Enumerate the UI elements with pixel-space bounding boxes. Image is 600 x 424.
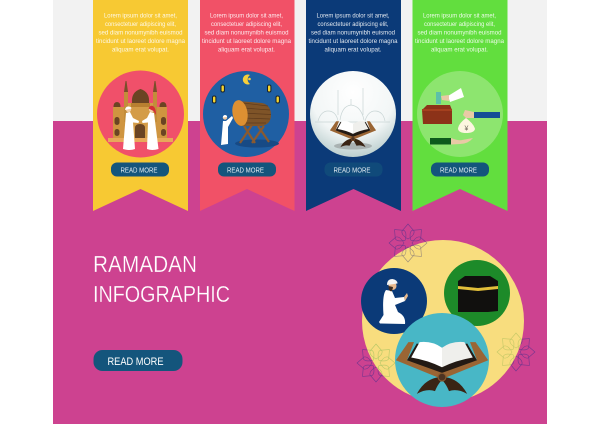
icon: mosque with two men [97, 70, 184, 158]
text block navy: sed diam nonumynibh euismod [311, 30, 395, 36]
icon: kaaba [444, 260, 510, 326]
main read more button: READ MORE [108, 356, 164, 368]
ribbon shape navy [306, 0, 401, 211]
text block green: consectetuer adipiscing elit, [424, 21, 495, 28]
text block green: sed diam nonumynibh euismod [418, 30, 502, 36]
text block navy: consectetuer adipiscing elit, [318, 21, 389, 28]
panel: navy ribbon [306, 0, 401, 211]
button red [218, 162, 276, 176]
button red: READ MORE [227, 165, 264, 174]
flower ornament left, purple part [357, 344, 395, 382]
text block yellow: Lorem ipsum dolor sit amet, [104, 12, 177, 20]
ribbon shape red [200, 0, 294, 211]
main read more button [94, 350, 182, 371]
text block red: tincidunt ut laoreet dolore magna [202, 38, 291, 45]
icon: drum and lanterns [203, 71, 289, 157]
icon: man praying [361, 268, 427, 334]
button navy [324, 162, 382, 176]
large yellow circle [362, 240, 524, 402]
text block navy: tincidunt ut laoreet dolore magna [308, 38, 398, 45]
flower parts over yellow circle [367, 242, 522, 377]
icon: charity box and hands: ¥ [465, 126, 469, 132]
text block red: Lorem ipsum dolor sit amet, [210, 12, 283, 20]
text block yellow: tincidunt ut laoreet dolore magna [96, 38, 185, 45]
icon: quran with mosque sketch [310, 71, 396, 157]
button green [431, 162, 489, 176]
panel: red ribbon [200, 0, 294, 211]
text block red: consectetuer adipiscing elit, [211, 21, 282, 28]
icon: open quran on teal [395, 313, 489, 407]
text block green: tincidunt ut laoreet dolore magna [415, 38, 504, 45]
text block yellow: sed diam nonumynibh euismod [98, 30, 183, 36]
background: grey top band [53, 0, 547, 121]
text block navy: Lorem ipsum dolor sit amet, [316, 12, 390, 20]
icon: charity box and hands [417, 71, 503, 157]
button yellow: READ MORE [120, 165, 158, 174]
ribbon shape green [412, 0, 508, 211]
button green: READ MORE [440, 165, 477, 174]
text block yellow: aliquam erat volupat. [112, 46, 169, 53]
panel: yellow ribbon [93, 0, 188, 211]
button navy: READ MORE [334, 165, 371, 174]
text block green: Lorem ipsum dolor sit amet, [423, 12, 496, 20]
text block red: aliquam erat volupat. [218, 46, 275, 53]
flower ornament right, purple part [497, 333, 535, 371]
illustration: ramadan icon cluster [357, 224, 535, 407]
button yellow [111, 162, 169, 176]
text block yellow: consectetuer adipiscing elit, [105, 21, 176, 28]
flower ornament top, purple part [389, 224, 427, 262]
title: INFOGRAPHIC [93, 281, 230, 307]
text block red: sed diam nonumynibh euismod [204, 30, 289, 36]
text block green: aliquam erat volupat. [431, 46, 488, 53]
background: pink main panel [53, 121, 547, 424]
title: RAMADAN [93, 251, 197, 277]
text block navy: aliquam erat volupat. [324, 46, 382, 53]
ribbon shape yellow [93, 0, 188, 211]
panel: green ribbon [412, 0, 508, 211]
